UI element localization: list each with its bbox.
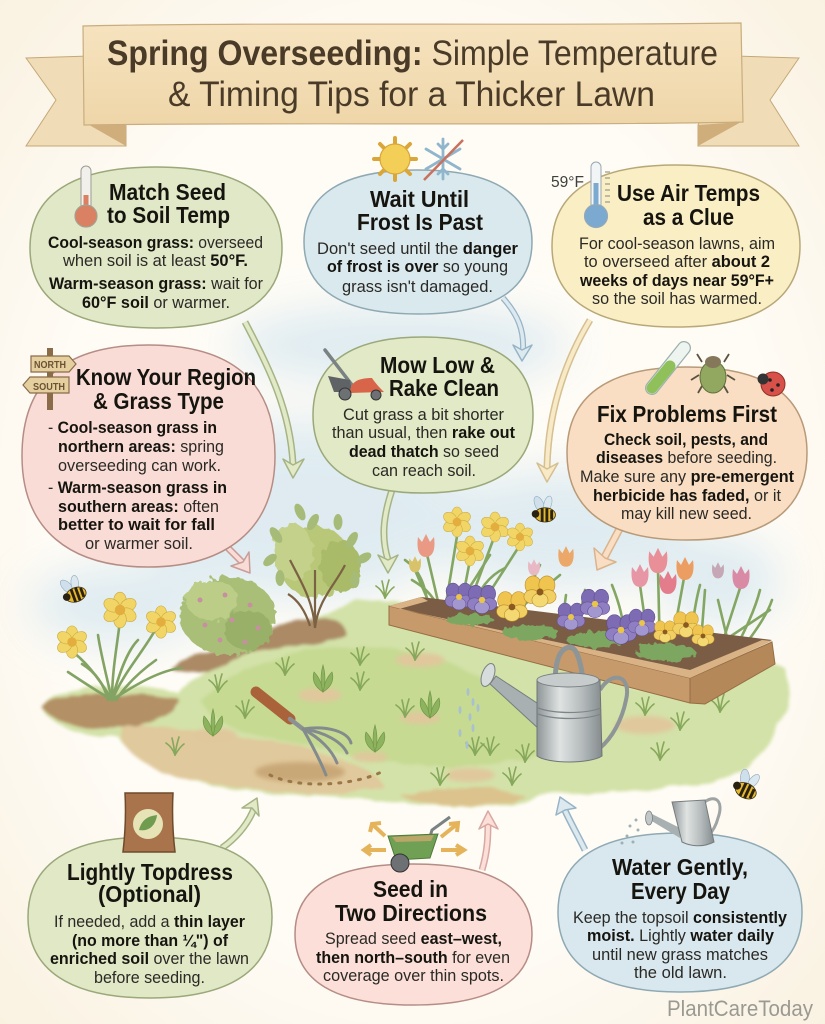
body text: then north–south for even bbox=[316, 949, 510, 967]
banner right tail bbox=[698, 56, 799, 146]
body text: of frost is over so young bbox=[327, 258, 508, 276]
body text: northern areas: spring bbox=[58, 438, 224, 456]
icon: lawn mower bbox=[325, 350, 384, 400]
body text bbox=[573, 909, 788, 982]
body text: Cool-season grass: overseed bbox=[48, 234, 263, 252]
heading: Lightly Topdress bbox=[67, 859, 233, 885]
body text: Cut grass a bit shorter bbox=[343, 406, 504, 424]
panel: seed in two directions bbox=[295, 817, 532, 1005]
sky watercolor wash bbox=[30, 305, 780, 645]
heading bbox=[335, 876, 487, 926]
heading: Seed in bbox=[373, 876, 448, 902]
panel: fix problems first bbox=[567, 348, 807, 540]
icon: 59F thermometer: 59°F bbox=[551, 174, 584, 191]
icon: direction arrows bbox=[364, 823, 464, 855]
heading: Fix Problems First bbox=[597, 401, 777, 427]
body text: For cool-season lawns, aim bbox=[579, 235, 775, 253]
arrow: region bbox=[228, 548, 250, 573]
body text: better to wait for fall bbox=[58, 516, 215, 534]
body text bbox=[50, 913, 249, 987]
heading: & Grass Type bbox=[93, 388, 224, 414]
icon: test tube bbox=[652, 348, 684, 388]
heading: (Optional) bbox=[98, 881, 201, 907]
title banner bbox=[26, 23, 799, 146]
body text bbox=[316, 930, 510, 985]
raised garden bed flowers back bbox=[405, 507, 772, 655]
panel: use air temps as a clue bbox=[551, 162, 800, 327]
title text: & Timing Tips for a Thicker Lawn bbox=[168, 75, 655, 114]
icon: crossed snowflake bbox=[424, 139, 463, 180]
body text bbox=[48, 419, 227, 553]
hand cultivator fork bbox=[256, 692, 385, 784]
icon: small watering can bbox=[620, 799, 720, 846]
panel: match seed to soil temp bbox=[30, 166, 282, 328]
heading: Wait Until bbox=[370, 186, 469, 212]
body text: the old lawn. bbox=[634, 964, 727, 982]
lawn ground bbox=[40, 599, 789, 807]
panel: lightly topdress bbox=[28, 793, 272, 998]
body text: coverage over thin spots. bbox=[323, 967, 504, 985]
raised bed pansies bbox=[445, 576, 714, 661]
body text: If needed, add a thin layer bbox=[54, 913, 246, 931]
raised garden bed bbox=[389, 597, 775, 704]
body text: Don't seed until the danger bbox=[317, 240, 519, 258]
body text bbox=[580, 431, 794, 523]
body text: grass isn't damaged. bbox=[342, 278, 493, 296]
banner left tail bbox=[26, 56, 126, 146]
heading: Every Day bbox=[631, 878, 730, 904]
heading: Frost Is Past bbox=[357, 209, 483, 235]
heading bbox=[617, 180, 760, 230]
heading: Mow Low & bbox=[380, 352, 495, 378]
heading: Water Gently, bbox=[612, 854, 748, 880]
arrow: mow bbox=[378, 490, 398, 573]
body text: herbicide has faded, or it bbox=[593, 487, 781, 505]
arrow: soil temp to lawn bbox=[245, 322, 304, 478]
body text: to overseed after about 2 bbox=[584, 253, 770, 271]
body text bbox=[48, 234, 263, 312]
heading bbox=[380, 352, 499, 401]
body text: overseeding can work. bbox=[58, 457, 221, 475]
bees bbox=[57, 495, 765, 802]
body text: when soil is at least 50°F. bbox=[62, 252, 248, 270]
body text: before seeding. bbox=[94, 969, 205, 987]
heading: to Soil Temp bbox=[107, 202, 230, 228]
icon: ladybug bbox=[758, 372, 785, 396]
body text: diseases before seeding. bbox=[596, 449, 777, 467]
heading: as a Clue bbox=[643, 204, 734, 230]
heading bbox=[357, 186, 483, 235]
arrow: topdress bbox=[222, 798, 259, 848]
icon: beetle bbox=[691, 354, 735, 393]
icon: seed spreader wheelbarrow bbox=[388, 817, 450, 872]
watermark: PlantCareToday bbox=[667, 996, 813, 1021]
body text: weeks of days near 59°F+ bbox=[579, 272, 774, 290]
body text: than usual, then rake out bbox=[332, 424, 515, 442]
icon: sun bbox=[374, 138, 416, 180]
panel: water gently bbox=[558, 799, 802, 992]
body text: 60°F soil or warmer. bbox=[82, 294, 230, 312]
panel: mow low and rake clean bbox=[313, 337, 533, 493]
arrow: water bbox=[556, 797, 585, 850]
icon: north south signpost bbox=[23, 348, 76, 410]
icon: thermometer bbox=[75, 166, 97, 227]
heading: Rake Clean bbox=[389, 375, 499, 401]
grass tufts bbox=[166, 580, 729, 785]
body text: Keep the topsoil consistently bbox=[573, 909, 788, 927]
arrow: air temps bbox=[537, 320, 590, 482]
heading: Two Directions bbox=[335, 900, 487, 926]
arrow: two directions bbox=[479, 811, 498, 870]
heading bbox=[67, 859, 233, 907]
arrow: fix problems bbox=[594, 528, 620, 570]
panel: wait until frost is past bbox=[304, 138, 532, 314]
soil patches bbox=[193, 653, 675, 782]
banner body bbox=[83, 23, 743, 125]
watering can bbox=[458, 647, 627, 762]
garden illustration bbox=[40, 495, 789, 807]
body text: dead thatch so seed bbox=[349, 443, 499, 461]
body text: Make sure any pre-emergent bbox=[580, 468, 794, 486]
heading: Know Your Region bbox=[76, 364, 256, 390]
body text: Check soil, pests, and bbox=[604, 431, 768, 449]
young tree bbox=[261, 502, 373, 628]
body text: (no more than ¼") of bbox=[72, 932, 228, 950]
body text: Spread seed east–west, bbox=[325, 930, 502, 948]
heading: Use Air Temps bbox=[617, 180, 760, 206]
body text: or warmer soil. bbox=[85, 535, 193, 553]
heading: Match Seed bbox=[109, 179, 226, 205]
body text bbox=[332, 406, 515, 480]
body text: until new grass matches bbox=[592, 946, 768, 964]
panel: know your region bbox=[22, 345, 275, 567]
arrow: frost bbox=[503, 298, 532, 361]
body text bbox=[317, 240, 519, 296]
heading bbox=[612, 854, 748, 904]
body text: enriched soil over the lawn bbox=[50, 950, 249, 968]
icon: soil bag bbox=[123, 793, 175, 852]
body text: southern areas: often bbox=[58, 498, 219, 516]
left daffodils bbox=[55, 592, 182, 700]
title text bbox=[107, 34, 718, 114]
icon: 59F thermometer bbox=[551, 162, 610, 228]
banner folds bbox=[84, 122, 741, 146]
body text: so the soil has warmed. bbox=[592, 290, 762, 308]
heading bbox=[107, 179, 230, 228]
body text: - Cool-season grass in bbox=[48, 419, 217, 437]
icon: north south signpost: SOUTH bbox=[33, 381, 65, 393]
body text: moist. Lightly water daily bbox=[587, 927, 775, 945]
body text: can reach soil. bbox=[372, 462, 476, 480]
body text: Warm-season grass: wait for bbox=[49, 275, 263, 293]
body text: - Warm-season grass in bbox=[48, 479, 227, 497]
body text: may kill new seed. bbox=[621, 505, 752, 523]
icon: north south signpost: NORTH bbox=[34, 359, 66, 371]
title text: Spring Overseeding: Simple Temperature bbox=[107, 34, 718, 73]
flowering shrub bbox=[180, 577, 276, 655]
body text bbox=[579, 235, 775, 308]
heading bbox=[76, 364, 256, 414]
